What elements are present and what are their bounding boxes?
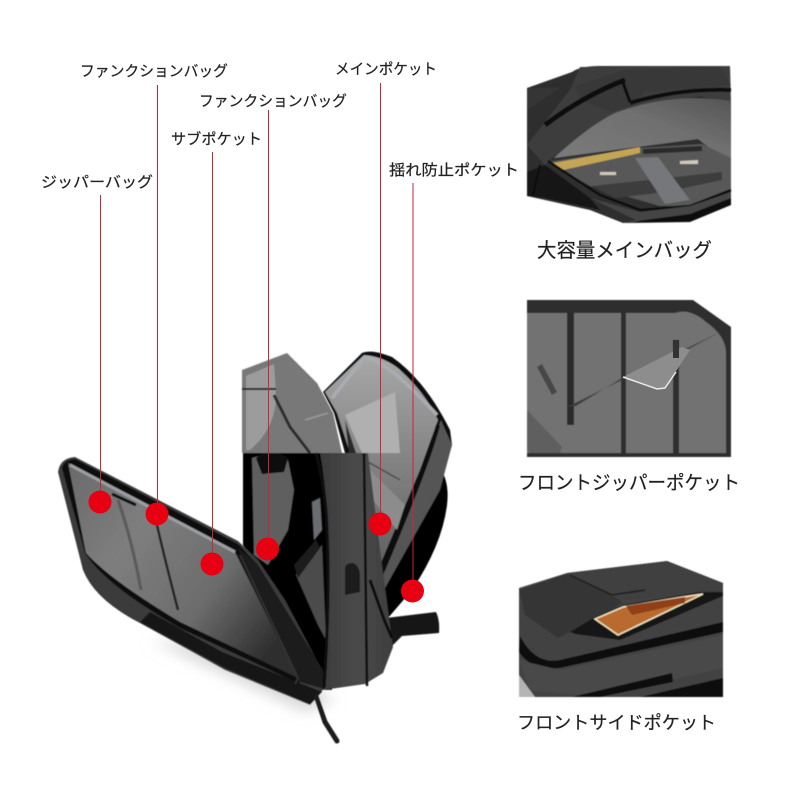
icon: phone in pocket <box>623 340 690 389</box>
leader lines and marker dots <box>88 83 424 602</box>
zipper pull <box>316 696 337 741</box>
photo: front side pocket <box>519 561 723 697</box>
watermark-tinted upper back panel and top handle <box>242 353 342 453</box>
front body panel <box>316 453 393 690</box>
USB port <box>345 563 360 595</box>
marker: ファンクションバッグ left <box>146 85 168 526</box>
ground shadow <box>150 640 335 712</box>
side strap <box>384 612 439 646</box>
photo: main compartment <box>527 66 731 223</box>
marker: メインポケット <box>368 83 392 536</box>
caption: フロントジッパーポケット: フロントジッパーポケット <box>518 472 740 494</box>
right open flap <box>323 352 452 590</box>
left open flap <box>58 457 323 705</box>
back pad <box>378 465 448 618</box>
caption: 大容量メインバッグ: 大容量メインバッグ <box>537 239 712 262</box>
label: メインポケット: メインポケット <box>335 61 437 78</box>
label: ファンクションバッグ centre: ファンクションバッグ <box>199 93 347 110</box>
label: 揺れ防止ポケット: 揺れ防止ポケット <box>389 162 519 179</box>
marker: ジッパーバッグ <box>88 195 112 514</box>
label: サブポケット: サブポケット <box>171 130 262 148</box>
large watermark letters <box>527 312 726 453</box>
photo: front zipper pocket <box>527 300 731 457</box>
caption: フロントサイドポケット: フロントサイドポケット <box>517 713 716 733</box>
central compartment <box>243 452 332 690</box>
label: ファンクションバッグ left: ファンクションバッグ <box>80 63 228 80</box>
marker: サブポケット <box>200 152 224 576</box>
marker: 揺れ防止ポケット <box>401 183 424 602</box>
backpack illustration <box>58 352 452 741</box>
label: ジッパーバッグ: ジッパーバッグ <box>41 174 153 191</box>
marker: ファンクションバッグ centre <box>256 110 279 560</box>
